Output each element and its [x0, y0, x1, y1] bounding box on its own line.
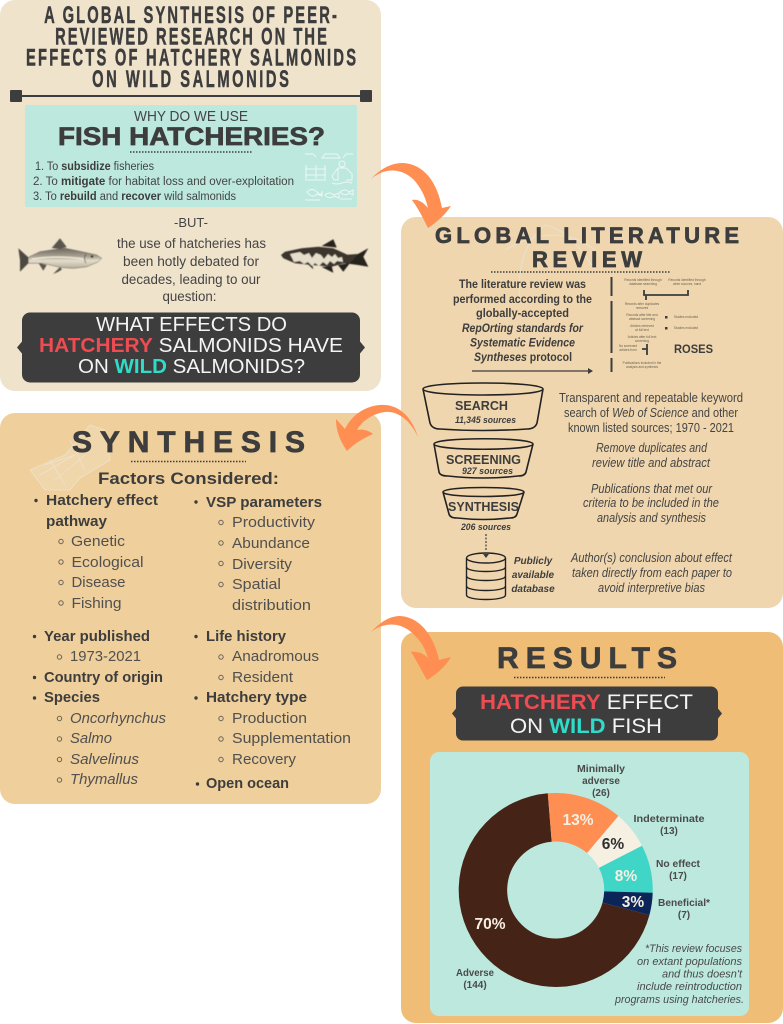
icon: hatchery line art [305, 154, 353, 200]
list: right column factors: distribution [232, 597, 311, 614]
text: synthesis description: criteria to be included in the [583, 496, 719, 510]
callout: research question [17, 312, 365, 382]
text: publicly available database: Publicly [514, 556, 553, 567]
chart: roses flow diagram: Records identified through [624, 278, 662, 282]
list: right column factors: Anadromous [232, 648, 319, 665]
chart: roses flow diagram: articles from [619, 348, 637, 352]
text: author conclusion [570, 551, 732, 595]
footnote: programs using hatcheries. [614, 994, 744, 1006]
text: author conclusion: Author(s) conclusion about effect [570, 551, 732, 565]
chart: roses flow diagram: screening [635, 339, 649, 343]
chart: roses flow diagram: at full text [635, 328, 649, 332]
reasons list [33, 161, 294, 203]
chart: roses flow diagram [612, 277, 713, 372]
funnel: synthesis [443, 488, 524, 532]
label: minimally adverse: (26) [592, 788, 610, 799]
text: screening description: Remove duplicates and [596, 441, 708, 455]
list: left column factors: 1973-2021 [70, 648, 141, 665]
text: roses protocol: Syntheses protocol [474, 350, 572, 364]
chart: roses flow diagram: other sources, hand [673, 282, 701, 286]
list: right column factors: Supplementation [232, 730, 351, 747]
text: author conclusion: avoid interpretive bias [598, 581, 705, 595]
callout: hatchery effect on wild fish [452, 686, 722, 740]
funnel: screening: SCREENING [446, 452, 521, 467]
funnel: synthesis: SYNTHESIS [448, 500, 519, 514]
icon: wild salmon illustration [281, 239, 368, 273]
text: roses protocol: globally-accepted [476, 306, 569, 320]
label: beneficial: (7) [678, 910, 690, 921]
icon: database [466, 553, 506, 600]
heading [435, 223, 739, 272]
list: left column factors: pathway [46, 513, 108, 530]
funnel: search: 11,345 sources [455, 415, 516, 425]
list: right column factors: VSP parameters [206, 494, 322, 511]
list: left column factors: Salvelinus [70, 751, 140, 768]
text: search description [559, 391, 743, 435]
chart: roses flow diagram: ROSES [674, 342, 713, 356]
list: left column factors: Country of origin [44, 669, 163, 686]
chart: roses flow diagram: Records after title and [626, 313, 658, 317]
chart: roses flow diagram: Records identified through [668, 278, 706, 282]
title: REVIEWED RESEARCH ON THE [55, 24, 327, 51]
chart: roses flow diagram: database searching [629, 282, 657, 286]
reasons list: 1. To subsidize fisheries [35, 161, 154, 173]
text: debate: the use of hatcheries has [117, 236, 266, 251]
chart: roses flow diagram: removed [636, 306, 648, 310]
text: roses protocol: performed according to the [453, 292, 592, 306]
title [26, 2, 356, 93]
label: minimally adverse [577, 764, 625, 799]
title: EFFECTS OF HATCHERY SALMONIDS [26, 45, 356, 72]
funnel: screening: 927 sources [462, 466, 513, 476]
label: beneficial [658, 898, 710, 921]
list: right column factors: Recovery [232, 751, 297, 768]
footnote: on extant populations [637, 956, 742, 968]
label: minimally adverse: Minimally [577, 764, 625, 775]
text: publicly available database [511, 556, 555, 595]
label: adverse: (144) [463, 980, 487, 991]
list: right column factors: Productivity [232, 514, 316, 531]
text: screening description [592, 441, 710, 470]
callout: research question: WHAT EFFECTS DO [96, 314, 287, 336]
icon: hatchery salmon illustration [18, 238, 102, 274]
text: roses protocol: Systematic Evidence [470, 336, 575, 350]
heading: REVIEW [532, 247, 642, 272]
list: left column factors: Thymallus [70, 771, 138, 788]
list: left column factors: Hatchery effect [46, 492, 158, 509]
panel: synthesis [0, 413, 381, 804]
reasons list: 3. To rebuild and recover wild salmonids [33, 191, 236, 203]
list: left column factors: Oncorhynchus [70, 710, 166, 727]
donut chart [459, 793, 653, 987]
text: screening description: review title and abstract [592, 456, 710, 470]
label: no effect [656, 859, 701, 882]
list: right column factors: Life history [206, 628, 287, 645]
text: debate: decades, leading to our [122, 272, 261, 287]
panel: results [401, 632, 783, 1023]
chart: roses flow diagram: Records after duplicates [625, 302, 660, 306]
callout: hatchery effect on wild fish: ON WILD FISH [510, 714, 662, 738]
text: roses protocol: The literature review was [459, 277, 586, 291]
funnel: synthesis: 206 sources [460, 522, 511, 532]
chart: roses flow diagram: Publications included in the [623, 361, 662, 365]
text: debate: question: [162, 289, 216, 304]
chart: roses flow diagram: abstract screening [629, 317, 655, 321]
callout: hatchery effect on wild fish: HATCHERY EFFECT [480, 690, 693, 714]
callout: why do we use fish hatcheries: FISH HATCHERIES? [58, 123, 325, 151]
label: beneficial: Beneficial* [658, 898, 710, 909]
funnel: search [423, 383, 543, 430]
heading: GLOBAL LITERATURE [435, 223, 739, 248]
chart: roses flow diagram: No screened [619, 344, 637, 348]
label: adverse: Adverse [456, 968, 494, 979]
chart: roses flow diagram: Studies excluded [674, 315, 698, 319]
text: roses protocol: RepOrting standards for [462, 321, 584, 335]
chart: roses flow diagram: Articles retrieved [630, 324, 654, 328]
donut chart: 8% [615, 868, 637, 885]
title: A GLOBAL SYNTHESIS OF PEER- [44, 2, 337, 29]
list: left column factors: Ecological [72, 554, 144, 571]
footnote [614, 943, 744, 1006]
footnote: and thus doesn't [662, 968, 743, 980]
arrow: literature review to synthesis [336, 405, 418, 451]
subheading: Factors Considered: [98, 469, 279, 488]
text: but: -BUT- [174, 215, 208, 230]
chart: roses flow diagram: Articles after full text [628, 335, 656, 339]
list: right column factors: Resident [232, 669, 294, 686]
donut chart: 6% [602, 836, 624, 853]
chart: roses flow diagram: Studies excluded [674, 326, 698, 330]
list: right column factors: Diversity [232, 556, 293, 573]
donut chart: 3% [622, 894, 644, 911]
text: author conclusion: taken directly from each paper to [572, 566, 732, 580]
label: indeterminate: Indeterminate [634, 814, 705, 825]
label: no effect: (17) [669, 871, 687, 882]
funnel: search: SEARCH [455, 398, 508, 413]
list: left column factors [33, 492, 166, 788]
title: ON WILD SALMONIDS [92, 66, 289, 93]
list: left column factors: Species [44, 689, 100, 706]
text: roses protocol [453, 277, 592, 364]
list: right column factors: Production [232, 710, 307, 727]
title divider bar [10, 90, 372, 102]
chart: roses flow diagram: analysis and synthesis [626, 365, 658, 369]
list: right column factors: Open ocean [206, 775, 289, 792]
list: left column factors: Fishing [72, 595, 122, 612]
callout: research question: HATCHERY SALMONIDS HAVE [39, 335, 343, 357]
arrow: funnel to database [483, 534, 489, 558]
list: right column factors: Hatchery type [206, 689, 307, 706]
callout: why do we use fish hatcheries: WHY DO WE USE [134, 108, 248, 125]
callout: why do we use fish hatcheries [25, 105, 357, 207]
panel: why hatcheries [0, 0, 381, 391]
text: synthesis description: analysis and synthesis [597, 511, 706, 525]
label: no effect: No effect [656, 859, 701, 870]
panel: donut chart card [430, 752, 749, 1016]
text: synthesis description: Publications that met our [591, 482, 713, 496]
text: search description: known listed sources; 1970 - 2021 [568, 421, 734, 435]
list: right column factors: Abundance [232, 535, 310, 552]
label: minimally adverse: adverse [582, 776, 620, 787]
list: right column factors [194, 494, 351, 792]
label: indeterminate [634, 814, 705, 837]
heading: SYNTHESIS [72, 426, 305, 459]
callout: research question: ON WILD SALMONIDS? [78, 356, 305, 378]
arrow: to roses diagram [472, 368, 593, 374]
text: search description: Transparent and repeatable keyword [559, 391, 743, 405]
text: debate: been hotly debated for [123, 254, 260, 269]
text: publicly available database: database [511, 584, 555, 595]
list: left column factors: Genetic [71, 533, 126, 550]
label: adverse [456, 968, 494, 991]
list: left column factors: Year published [44, 628, 150, 645]
donut chart: 70% [474, 916, 506, 933]
funnel: screening [434, 439, 533, 478]
arrow: intro to literature review [371, 163, 451, 228]
list: left column factors: Salmo [70, 730, 112, 747]
footnote: *This review focuses [645, 943, 742, 955]
panel: global literature review [401, 217, 783, 608]
arrow: synthesis to results [371, 616, 451, 680]
label: indeterminate: (13) [660, 826, 678, 837]
list: right column factors: Spatial [232, 576, 281, 593]
donut chart: 13% [562, 812, 594, 829]
list: left column factors: Disease [72, 574, 126, 591]
text: publicly available database: available [512, 570, 555, 581]
reasons list: 2. To mitigate for habitat loss and over-exploitation [33, 176, 294, 188]
text: synthesis description [583, 482, 719, 525]
text: search description: search of Web of Science and other [564, 406, 738, 420]
heading: RESULTS [497, 642, 677, 675]
text: debate [117, 236, 266, 304]
footnote: include reintroduction [637, 981, 742, 993]
